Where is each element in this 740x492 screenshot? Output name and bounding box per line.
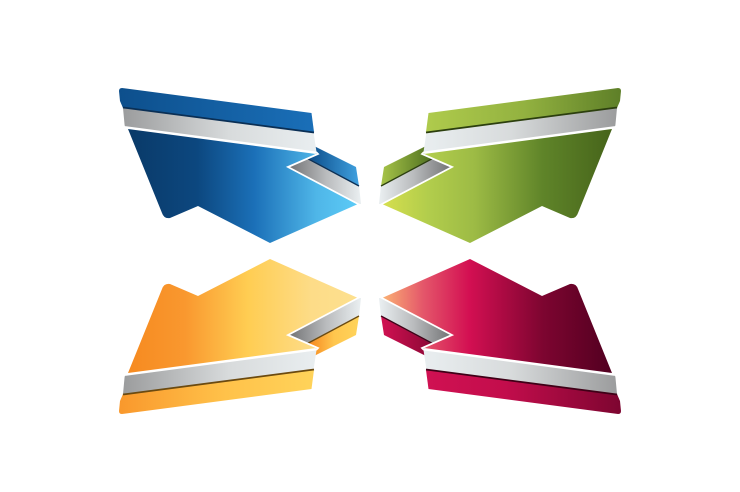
arrow: green, upper right	[379, 88, 621, 243]
arrow: orange, lower left	[119, 259, 361, 414]
arrow: crimson, lower right	[379, 259, 621, 414]
arrow: blue, upper left	[119, 88, 361, 243]
